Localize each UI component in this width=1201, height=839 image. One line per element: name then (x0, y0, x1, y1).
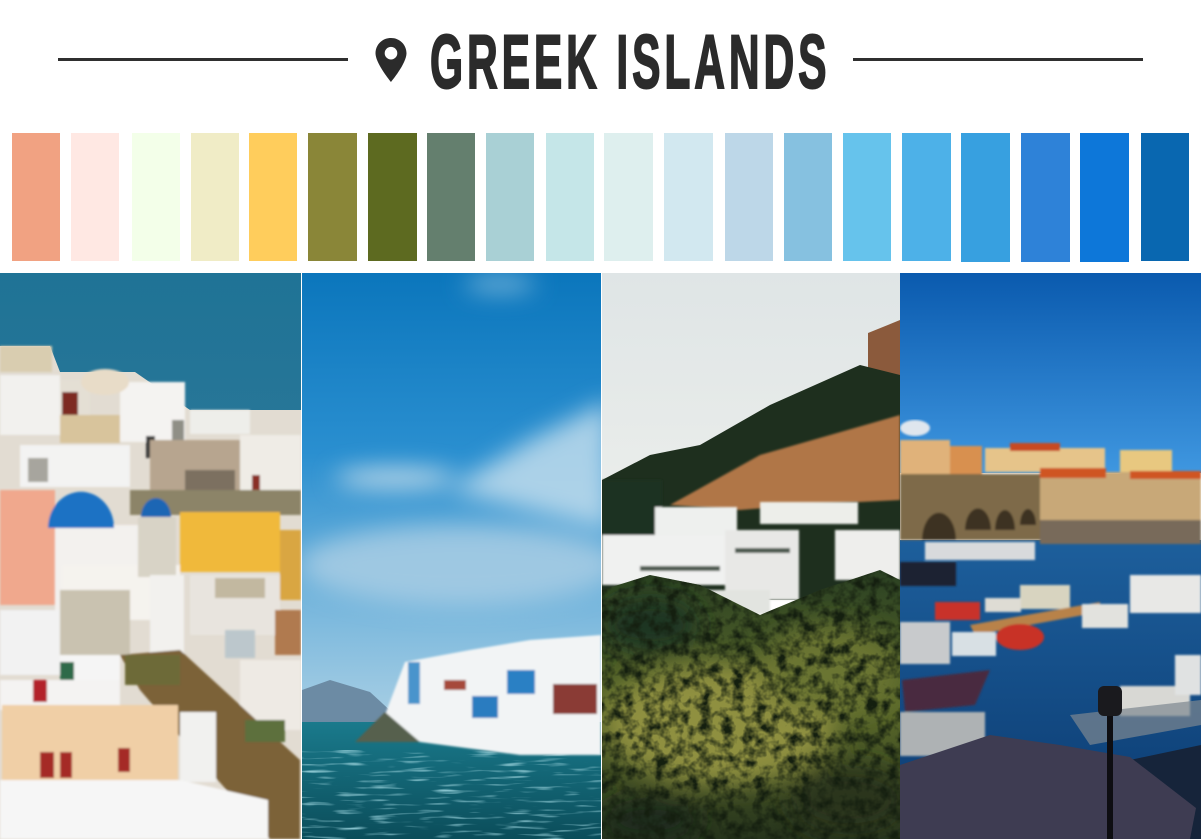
icon: map pin (376, 38, 406, 82)
panel: Lindos hillside photo (600, 273, 910, 839)
colour palette swatches (12, 133, 1189, 262)
title (58, 20, 1143, 105)
panel: Chania harbour photo (900, 273, 1201, 839)
panel: Santorini village photo (0, 273, 301, 839)
heading text: GREEK ISLANDS (430, 20, 826, 105)
panel: Little Venice seaside photo (300, 273, 620, 839)
